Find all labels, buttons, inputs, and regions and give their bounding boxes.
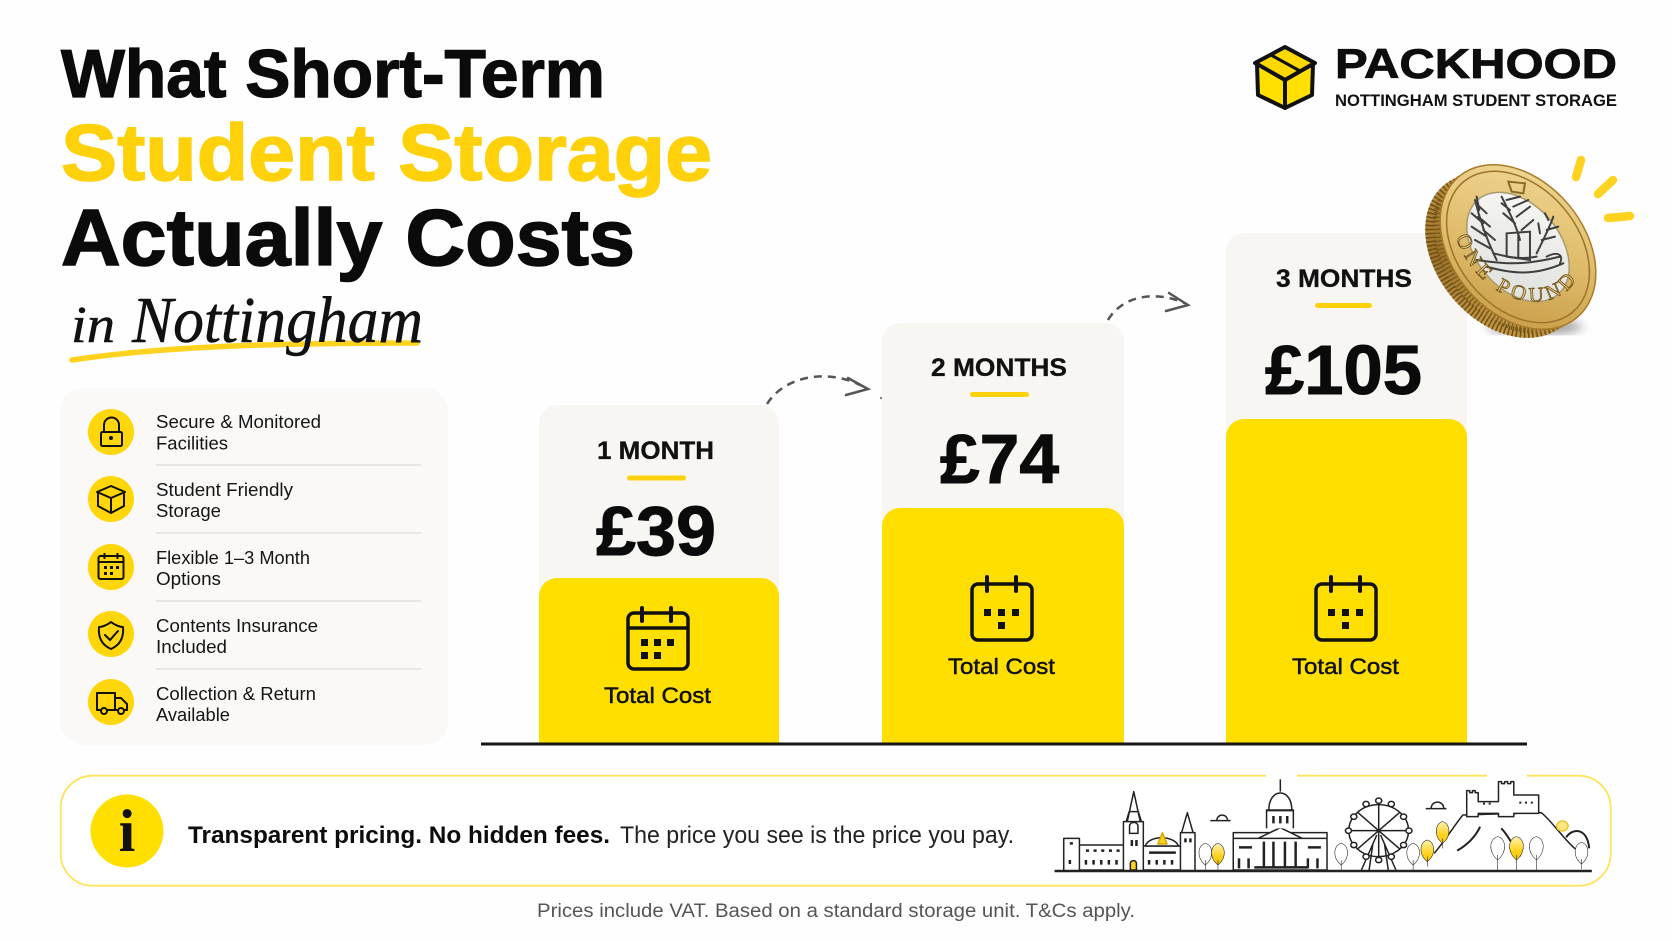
subtitle: in Nottingham: in (71, 297, 115, 354)
bar: 1 month (539, 405, 779, 744)
bar: 1 month: Total Cost (604, 683, 711, 708)
feature: collection: Collection & Return (156, 684, 316, 704)
logo wordmark: PACKHOOD (1335, 40, 1617, 87)
title (61, 36, 712, 282)
bar: 2 months: 2 MONTHS (931, 354, 1067, 382)
coin engraving and lettering: ONE POUND (1457, 234, 1574, 302)
icon: info (90, 794, 164, 868)
feature: insurance: Contents Insurance (156, 616, 318, 636)
illustration: Nottingham skyline (1055, 779, 1592, 871)
bar: 2 months (882, 323, 1124, 744)
bar: 3 months: 3 MONTHS (1276, 265, 1412, 293)
feature: secure: Facilities (156, 434, 228, 454)
icon: info: i (119, 798, 135, 864)
feature: insurance (88, 611, 318, 657)
subtitle: in Nottingham: Nottingham (131, 284, 423, 357)
banner text: The price you see is the price you pay. (620, 822, 1014, 849)
arrow: 2 months to 3 months (1108, 293, 1188, 320)
title: Actually Costs (61, 193, 635, 282)
bar: 3 months: Total Cost (1292, 654, 1399, 679)
bar: 1 month: 1 MONTH (597, 437, 714, 465)
icon: calendar (972, 577, 1032, 640)
feature: insurance: Included (156, 637, 227, 657)
feature: flexible: Flexible 1–3 Month (156, 548, 310, 568)
icon: calendar (628, 608, 688, 669)
bar: 3 months (1226, 233, 1467, 744)
arrow: 1 month to 2 months (767, 376, 882, 404)
title: What Short-Term (61, 36, 605, 112)
bar: 3 months: £105 (1265, 331, 1422, 409)
chart baseline (481, 742, 1527, 746)
feature: student friendly: Storage (156, 501, 221, 521)
feature: student friendly: Student Friendly (156, 480, 293, 500)
logo tagline: NOTTINGHAM STUDENT STORAGE (1335, 92, 1617, 110)
title: Student Storage (61, 108, 712, 197)
bar: 2 months: Total Cost (948, 654, 1055, 679)
feature: flexible: Options (156, 569, 221, 589)
coin sparkles (1576, 160, 1630, 218)
feature: collection (88, 679, 316, 725)
icon: pound coin (1425, 156, 1634, 338)
chart: price bars (481, 233, 1527, 746)
icon: box logo (1255, 47, 1315, 108)
feature: secure: Secure & Monitored (156, 412, 321, 432)
banner text: Transparent pricing. No hidden fees. (188, 822, 610, 849)
coin engraving and lettering (1457, 180, 1574, 302)
feature: student friendly (88, 476, 293, 522)
feature: collection: Available (156, 705, 230, 725)
feature: flexible (88, 544, 310, 590)
footnote: Prices include VAT. Based on a standard storage unit. T&Cs apply. (537, 901, 1135, 922)
bar: 2 months: £74 (940, 420, 1059, 498)
panel: features (60, 388, 448, 745)
bar: 1 month: £39 (596, 492, 716, 570)
callout: pricing banner (61, 772, 1611, 886)
logo: Packhood (1255, 40, 1617, 110)
feature: secure (88, 409, 321, 455)
icon: calendar (1316, 577, 1376, 640)
